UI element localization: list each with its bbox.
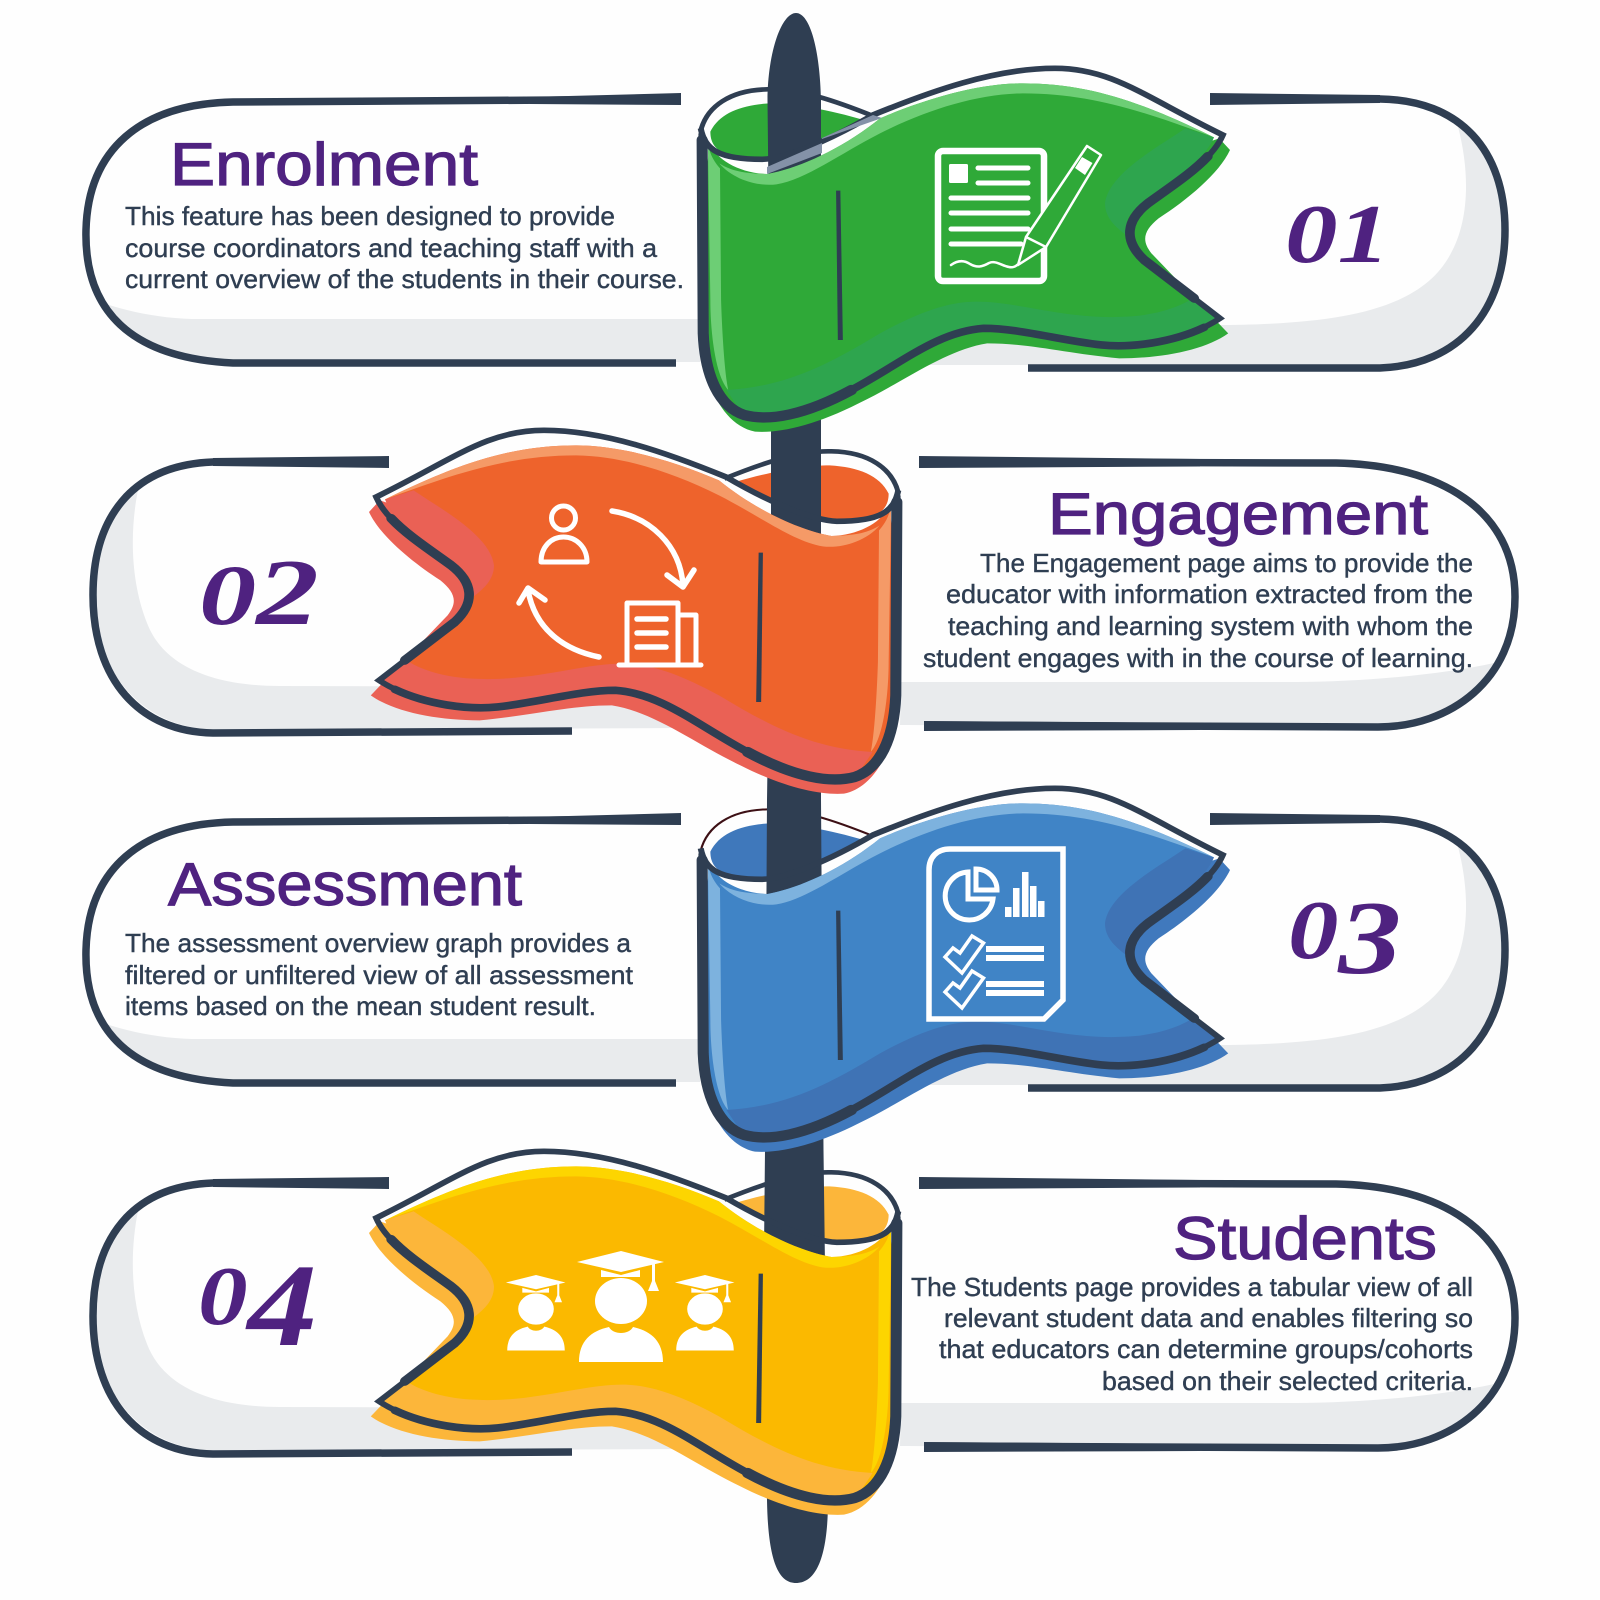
flag 1 sleeve back: [701, 89, 875, 159]
icon: document and pencil: [938, 146, 1101, 281]
number 04: 4: [244, 1240, 317, 1371]
text box 2 outline: [93, 456, 1515, 733]
number 03: 0: [1288, 884, 1338, 977]
heading: Assessment: Assessment: [168, 851, 522, 918]
text block: Engagement: student engages with in the course of learning.: [923, 643, 1473, 673]
flag 3: blue: [701, 788, 1230, 1152]
icon: person, cycle arrows and building: [519, 506, 701, 665]
text box 4 outline: [93, 1177, 1515, 1454]
number 02: 02: [199, 540, 319, 644]
text block: Students: based on their selected criteria.: [1102, 1366, 1473, 1396]
text block: Students: relevant student data and enables filtering so: [944, 1303, 1473, 1333]
text box 1 outline: [86, 93, 1505, 368]
text block: Engagement: teaching and learning system with whom the: [948, 611, 1473, 641]
text block: Assessment: items based on the mean student result.: [125, 991, 596, 1021]
text block: Assessment: [125, 928, 634, 1021]
icon: report with pie chart, bars and checklist: [929, 849, 1063, 1019]
text block: Enrolment: [125, 201, 684, 294]
flag 3 sleeve back: [701, 809, 875, 879]
text box 3 outline: [86, 813, 1505, 1088]
text block: Enrolment: course coordinators and teaching staff with a: [125, 233, 658, 263]
text block: Engagement: [923, 548, 1473, 673]
number 03: 3: [1337, 881, 1401, 997]
text block: Students: that educators can determine groups/cohorts: [939, 1334, 1473, 1364]
heading: Enrolment: Enrolment: [170, 131, 478, 198]
text block: Enrolment: This feature has been designed to provide: [125, 201, 615, 231]
text block: Students: [911, 1272, 1473, 1396]
number 01: 01: [1285, 187, 1390, 281]
text block: Assessment: filtered or unfiltered view of all assessment: [125, 960, 634, 990]
text block: Enrolment: current overview of the students in their course.: [125, 264, 684, 294]
icon: three graduates: [506, 1251, 734, 1362]
text block: Assessment: The assessment overview graph provides a: [125, 928, 632, 958]
text block: Students: The Students page provides a tabular view of all: [911, 1272, 1473, 1302]
text block: Engagement: The Engagement page aims to provide the: [980, 548, 1473, 578]
heading: Engagement: Engagement: [1048, 482, 1428, 547]
flag pole: [764, 13, 828, 1583]
number 04: 0: [198, 1249, 248, 1342]
flag 4 sleeve back: [724, 1172, 898, 1242]
text block: Engagement: educator with information extracted from the: [946, 579, 1473, 609]
flag 2 sleeve back: [724, 451, 898, 521]
flag 2: orange: [369, 430, 898, 794]
flag 1: green: [701, 68, 1230, 432]
flag 4: yellow: [369, 1151, 898, 1515]
heading: Students: Students: [1173, 1205, 1437, 1272]
